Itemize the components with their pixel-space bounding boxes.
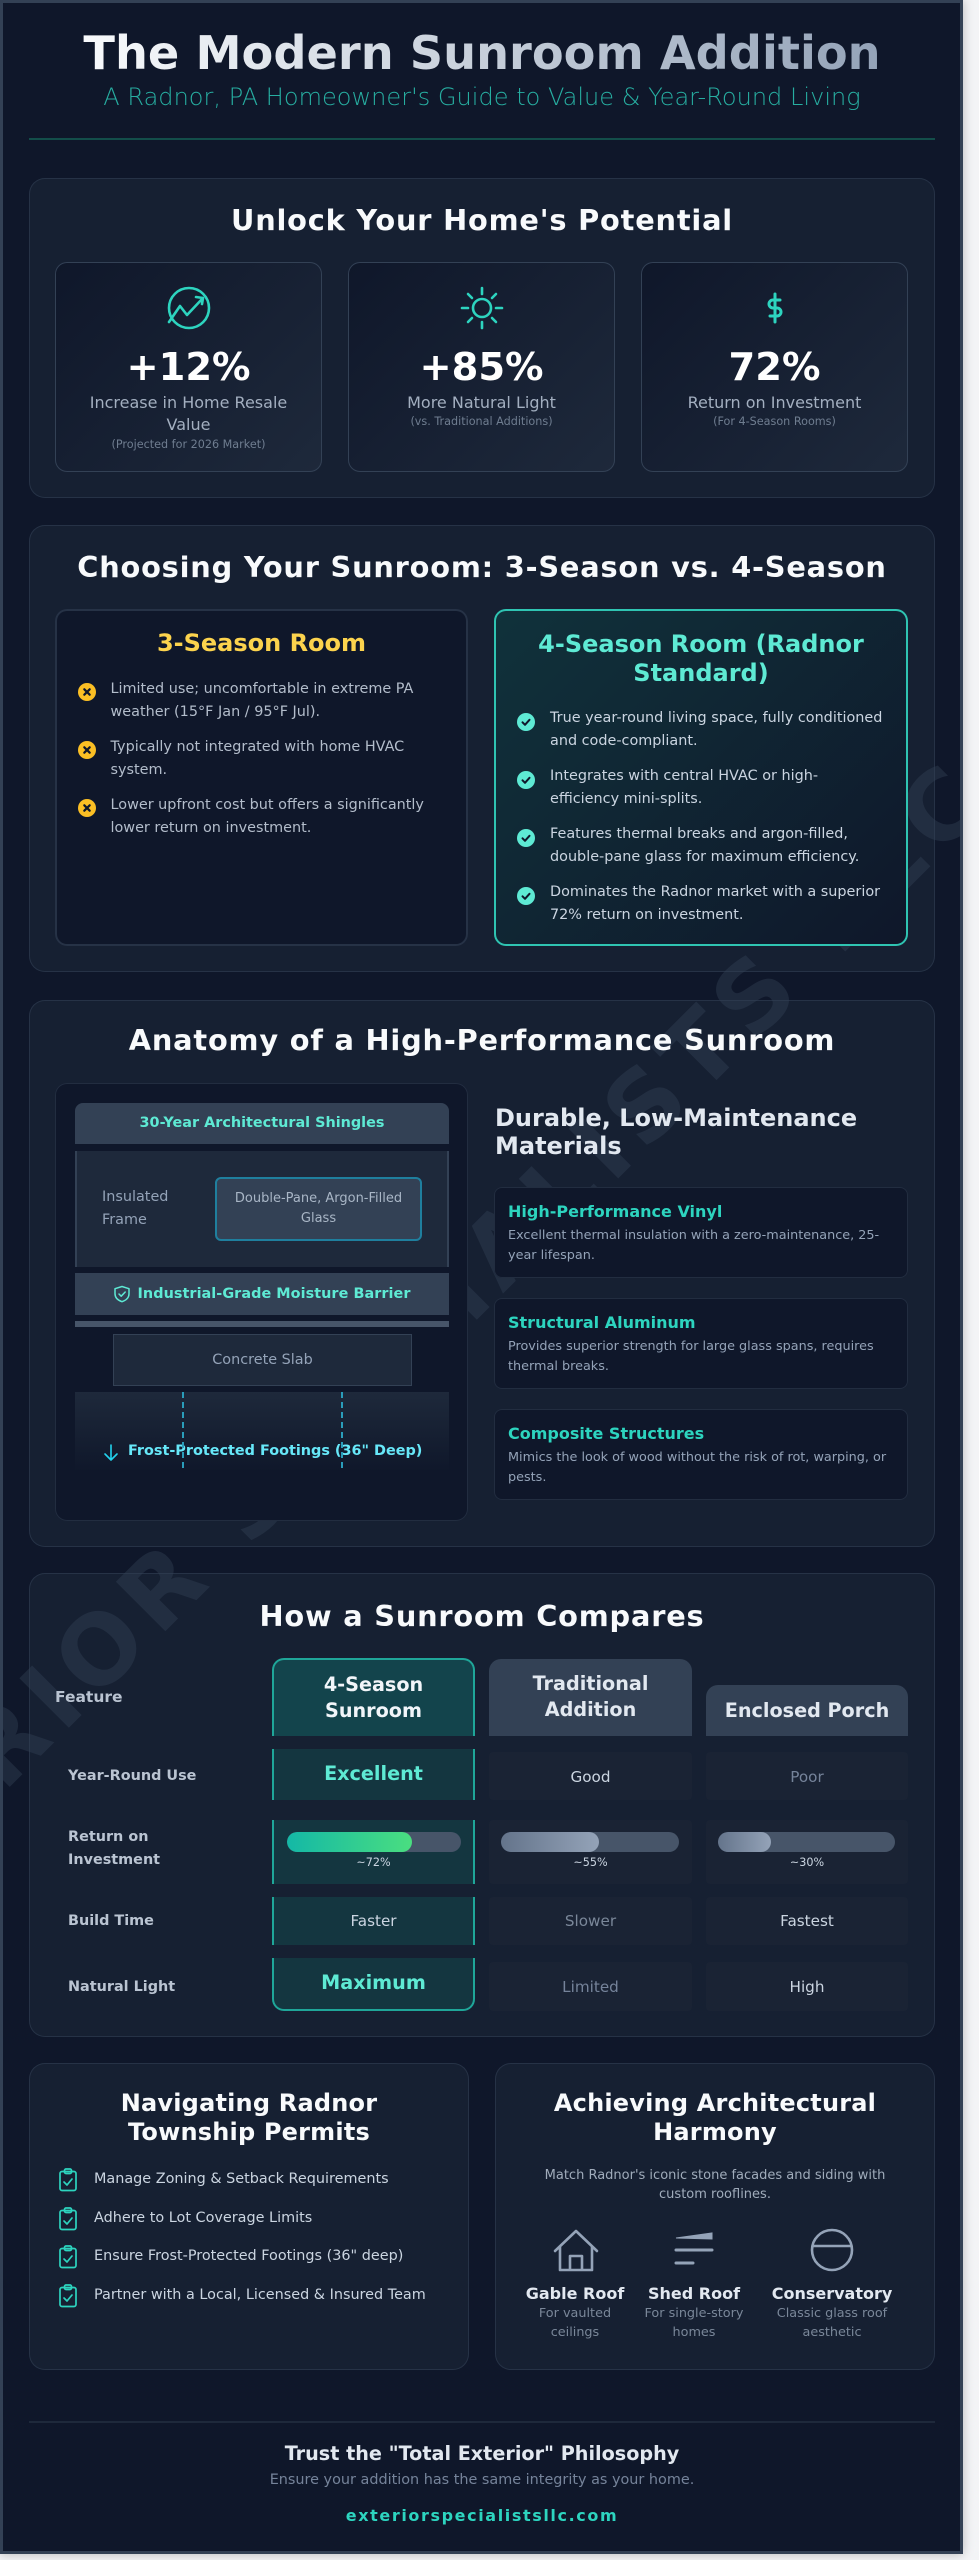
- cell: high: High: [790, 1978, 824, 1996]
- roof option: conservatory: aesthetic: [802, 2325, 862, 2340]
- intro text: custom rooflines.: [659, 2187, 771, 2202]
- stat card: resale value: [55, 262, 322, 472]
- icon: down arrow: [104, 1444, 118, 1461]
- list item: Limited use; uncomfortable in extreme PA: [110, 680, 413, 696]
- header: [83, 26, 881, 111]
- subheading: materials: [495, 1104, 857, 1160]
- list item: double-pane glass for maximum efficiency.: [550, 849, 859, 865]
- stat label: Increase in Home Resale: [90, 393, 287, 412]
- stat value: 72%: [729, 345, 820, 390]
- heading: Achieving Architectural: [554, 2089, 876, 2117]
- material card: aluminum: [494, 1298, 908, 1389]
- cell: 55 percent bar: [489, 1820, 692, 1884]
- list item: Integrates with central HVAC or high-: [550, 768, 818, 784]
- icon: shed roof: [674, 2232, 714, 2264]
- table header: traditional addition: Addition: [545, 1698, 636, 1721]
- panel: navigating radnor permits: [29, 2063, 469, 2370]
- layer: concrete slab: [113, 1334, 412, 1386]
- cell: faster: [272, 1897, 475, 1945]
- card title: Standard): [633, 659, 769, 687]
- cell: maximum: [272, 1958, 475, 2011]
- stat value: +12%: [126, 345, 251, 390]
- stat card: natural light: [348, 262, 615, 472]
- heading: Navigating Radnor: [121, 2089, 377, 2117]
- table header: 4-season sunroom: 4-Season: [324, 1673, 423, 1696]
- stat value: +85%: [419, 345, 544, 390]
- row label: Investment: [68, 1852, 160, 1868]
- table header: 4-season sunroom: Sunroom: [325, 1699, 422, 1722]
- heading: Unlock Your Home's Potential: [231, 203, 733, 237]
- panel: choosing your sunroom: [29, 525, 935, 972]
- stat note: (For 4-Season Rooms): [713, 415, 836, 428]
- row: year-round use: [68, 1749, 824, 1800]
- checklist item: Ensure Frost-Protected Footings (36" deep): [94, 2248, 403, 2264]
- roof option: conservatory: Conservatory: [772, 2284, 892, 2303]
- row: return on investment: [68, 1820, 895, 1884]
- roof option: gable: ceilings: [551, 2325, 599, 2340]
- checklist item: Partner with a Local, Licensed & Insured Team: [94, 2286, 426, 2302]
- cell: 72 percent bar: [272, 1820, 475, 1884]
- glass pane: Glass: [301, 1211, 336, 1226]
- cell: fastest: Fastest: [780, 1912, 834, 1930]
- list item: True year-round living space, fully conditioned: [550, 710, 882, 726]
- table header: enclosed porch: Enclosed Porch: [725, 1699, 889, 1722]
- checklist item: [59, 2207, 312, 2230]
- stat label: Return on Investment: [688, 393, 861, 412]
- roof option: gable: [526, 2284, 624, 2340]
- stat note: (Projected for 2026 Market): [112, 438, 265, 451]
- list item: weather (15°F Jan / 95°F Jul).: [110, 704, 320, 720]
- roof option: shed: For single-story: [645, 2306, 743, 2321]
- frame label: Frame: [102, 1212, 147, 1228]
- material card: aluminum: Structural Aluminum: [508, 1313, 696, 1332]
- card: 3-season room: Lower upfront cost but offers a significantly: [110, 796, 424, 812]
- intro text: Match Radnor's iconic stone facades and siding with: [545, 2168, 885, 2183]
- material card: vinyl: year lifespan.: [508, 1248, 595, 1263]
- list item: [517, 710, 882, 749]
- material card: composite: Mimics the look of wood without the risk of rot, warping, or: [508, 1450, 886, 1465]
- subtitle: A Radnor, PA Homeowner's Guide to Value & Year-Round Living: [103, 83, 861, 111]
- stat label: [90, 393, 287, 434]
- panel: unlock your home's potential: [29, 178, 935, 498]
- cell: excellent: [272, 1749, 475, 1800]
- card: 3-season room: lower return on investment.: [110, 820, 311, 836]
- card title: 3-Season Room: [157, 629, 366, 657]
- panel: architectural harmony: [495, 2063, 935, 2370]
- card title: [538, 630, 864, 687]
- cell: slower: Slower: [565, 1912, 616, 1930]
- footing label: Frost-Protected Footings (36" Deep): [128, 1443, 422, 1459]
- checklist item: Manage Zoning & Setback Requirements: [94, 2171, 389, 2187]
- cell: maximum: Maximum: [321, 1971, 426, 1994]
- material card: composite: [494, 1409, 908, 1500]
- checklist item: [59, 2168, 389, 2192]
- cell: poor: Poor: [790, 1768, 824, 1786]
- frame label: Insulated: [102, 1189, 168, 1205]
- icon: trending chart: [168, 286, 210, 330]
- row label: Build Time: [68, 1912, 154, 1928]
- layer: shingles: [75, 1103, 449, 1144]
- cell: 55 percent bar: ~55%: [573, 1856, 608, 1869]
- list item: [78, 680, 414, 720]
- material card: aluminum: Provides superior strength for large glass spans, requires: [508, 1339, 874, 1354]
- cell: good: [489, 1752, 692, 1800]
- footer text: Ensure your addition has the same integrity as your home.: [270, 2472, 694, 2488]
- heading: How a Sunroom Compares: [260, 1598, 704, 1632]
- checklist item: Adhere to Lot Coverage Limits: [94, 2210, 312, 2226]
- layer: concrete slab: Concrete Slab: [212, 1352, 313, 1368]
- list item: [78, 796, 424, 836]
- subheading: materials: Durable, Low-Maintenance: [495, 1104, 857, 1132]
- icon: dollar: [768, 292, 782, 324]
- roof option: gable: For vaulted: [539, 2306, 611, 2321]
- cell: good: Good: [570, 1768, 610, 1786]
- cell: 30 percent bar: [706, 1820, 908, 1884]
- diagram: sunroom cross-section: [55, 1083, 468, 1521]
- layer: moisture barrier: [75, 1273, 449, 1315]
- cell: high: [706, 1962, 908, 2011]
- cell: limited: Limited: [562, 1978, 619, 1996]
- row label: [68, 1828, 160, 1868]
- list item: [517, 826, 859, 865]
- roof option: conservatory: [772, 2284, 892, 2340]
- list item: efficiency mini-splits.: [550, 791, 702, 807]
- checklist item: [59, 2245, 403, 2268]
- table header: traditional addition: Traditional: [533, 1672, 648, 1695]
- title: The Modern Sunroom Addition: [83, 26, 881, 80]
- list item: Dominates the Radnor market with a superior: [550, 884, 880, 900]
- card title: 4-Season Room (Radnor: [538, 630, 864, 658]
- card: 3-season room: system.: [110, 762, 167, 778]
- cell: limited: [489, 1962, 692, 2011]
- website: exteriorspecialistsllc.com: [346, 2506, 618, 2525]
- icon: shield: [114, 1286, 130, 1302]
- glass pane: [215, 1177, 422, 1241]
- roof option: conservatory: Classic glass roof: [777, 2306, 887, 2321]
- list item: 72% return on investment.: [550, 907, 743, 923]
- heading: Harmony: [653, 2118, 777, 2146]
- roof option: shed: homes: [673, 2325, 715, 2340]
- material card: vinyl: Excellent thermal insulation with a zero-maintenance, 25-: [508, 1228, 879, 1243]
- layer: shingles: 30-Year Architectural Shingles: [140, 1115, 384, 1131]
- material card: composite: pests.: [508, 1470, 546, 1485]
- card: 4-season room: [494, 609, 908, 946]
- layer: sill strip: [75, 1321, 449, 1327]
- card: 3-season room: Typically not integrated with home HVAC: [110, 738, 404, 754]
- row: build time: [68, 1897, 834, 1945]
- cell: slower: [489, 1897, 692, 1945]
- row label: Natural Light: [68, 1978, 175, 1994]
- glass pane: Double-Pane, Argon-Filled: [235, 1191, 402, 1206]
- footer: [29, 2421, 935, 2531]
- table header: enclosed porch: [706, 1685, 908, 1736]
- stat card: return on investment: [641, 262, 908, 472]
- table header: traditional addition: [489, 1659, 692, 1736]
- panel: how a sunroom compares: [29, 1573, 935, 2037]
- table header: feature: Feature: [55, 1688, 123, 1706]
- heading: [554, 2089, 876, 2146]
- list item: [78, 738, 404, 778]
- subheading: materials: Materials: [495, 1132, 622, 1160]
- frame label: [102, 1189, 168, 1228]
- heading: Township Permits: [128, 2118, 370, 2146]
- heading: Choosing Your Sunroom: 3-Season vs. 4-Season: [77, 550, 887, 584]
- row label: Year-Round Use: [68, 1768, 196, 1784]
- stat label: Value: [167, 415, 210, 434]
- layer: footings: [75, 1392, 449, 1472]
- card: 3-season room: [55, 609, 468, 946]
- list item: [517, 768, 818, 807]
- cell: poor: [706, 1752, 908, 1800]
- icon: conservatory: [810, 2228, 854, 2272]
- roof option: shed: [645, 2284, 743, 2340]
- icon: sun: [460, 286, 504, 330]
- material card: vinyl: High-Performance Vinyl: [508, 1202, 722, 1221]
- material card: aluminum: thermal breaks.: [508, 1359, 609, 1374]
- cell: faster: Faster: [350, 1912, 397, 1930]
- stat note: (vs. Traditional Additions): [410, 415, 553, 428]
- checklist item: [59, 2284, 426, 2308]
- list item: Features thermal breaks and argon-filled,: [550, 826, 848, 842]
- icon: gable roof: [554, 2230, 598, 2272]
- material card: vinyl: [494, 1187, 908, 1278]
- roof option: gable: Gable Roof: [526, 2284, 624, 2303]
- layer: insulated frame: [75, 1151, 449, 1267]
- cell: 30 percent bar: ~30%: [790, 1856, 824, 1869]
- footer headline: Trust the "Total Exterior" Philosophy: [285, 2442, 679, 2465]
- roof option: shed: Shed Roof: [648, 2284, 740, 2303]
- cell: excellent: Excellent: [324, 1762, 423, 1785]
- intro text: [545, 2168, 885, 2202]
- table header: 4-season sunroom: [272, 1658, 475, 1736]
- footing lines: [182, 1392, 343, 1468]
- stat label: More Natural Light: [407, 393, 556, 412]
- heading: Anatomy of a High-Performance Sunroom: [129, 1023, 835, 1057]
- layer: moisture barrier: Industrial-Grade Moisture Barrier: [138, 1286, 410, 1302]
- cell: 72 percent bar: ~72%: [356, 1856, 391, 1869]
- list item: [517, 884, 880, 923]
- heading: [121, 2089, 378, 2146]
- panel: anatomy of a sunroom: [29, 1000, 935, 1547]
- material card: composite: Composite Structures: [508, 1424, 704, 1443]
- cell: fastest: [706, 1897, 908, 1945]
- list item: and code-compliant.: [550, 733, 698, 749]
- row label: Return on: [68, 1828, 148, 1844]
- row: natural light: [68, 1958, 824, 2011]
